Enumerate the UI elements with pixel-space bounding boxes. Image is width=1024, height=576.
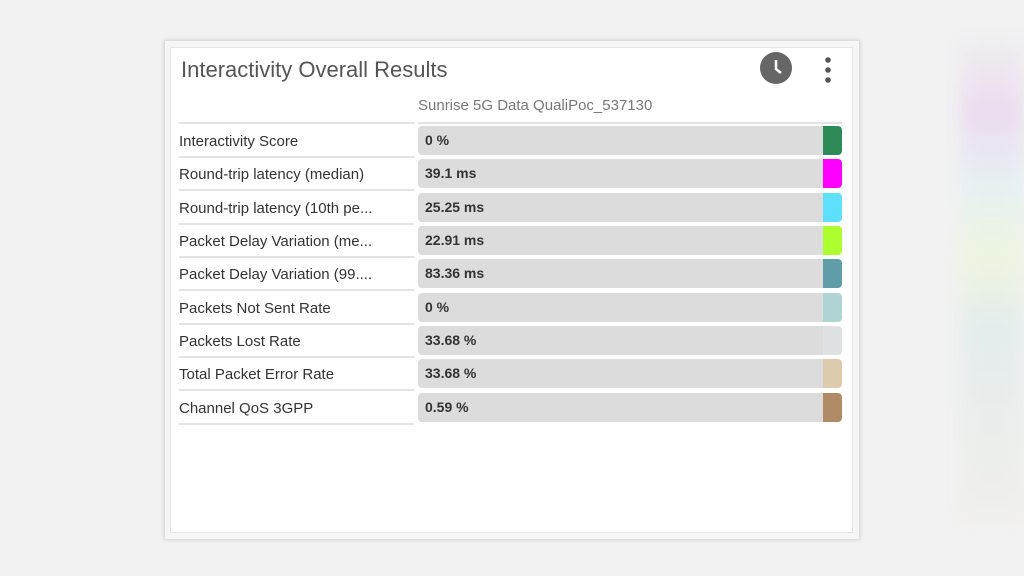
icon: clock [760,52,792,84]
table rows: 33.68 % [425,332,476,348]
icon: menu [825,57,831,83]
panel: card [164,40,860,540]
table rows: 22.91 ms [425,232,484,248]
table rows: Interactivity Score [179,133,298,150]
table rows: Round-trip latency (10th pe... [179,200,372,216]
table rows: 25.25 ms [425,198,484,214]
title: Interactivity Overall Results [181,57,448,82]
table rows: 33.68 % [425,365,476,381]
table rows: Round-trip latency (median) [179,166,364,183]
table rows: 39.1 ms [425,165,476,181]
table rows: Packet Delay Variation (99.... [179,266,372,283]
panel: inner card [170,47,853,533]
table rows: Packet Delay Variation (me... [179,233,372,250]
table rows: Packets Not Sent Rate [179,300,331,316]
table rows: Total Packet Error Rate [179,366,334,383]
table rows: Packets Lost Rate [179,333,301,350]
table rows: 83.36 ms [425,265,484,281]
table rows: 0 % [425,132,449,148]
table rows [179,126,842,425]
table rows: 0 % [425,298,449,314]
column header: Sunrise 5G Data QualiPoc_537130 [418,97,652,114]
background glow [960,40,1024,520]
table rows: 0.59 % [425,398,469,414]
table rows: Channel QoS 3GPP [179,400,313,416]
